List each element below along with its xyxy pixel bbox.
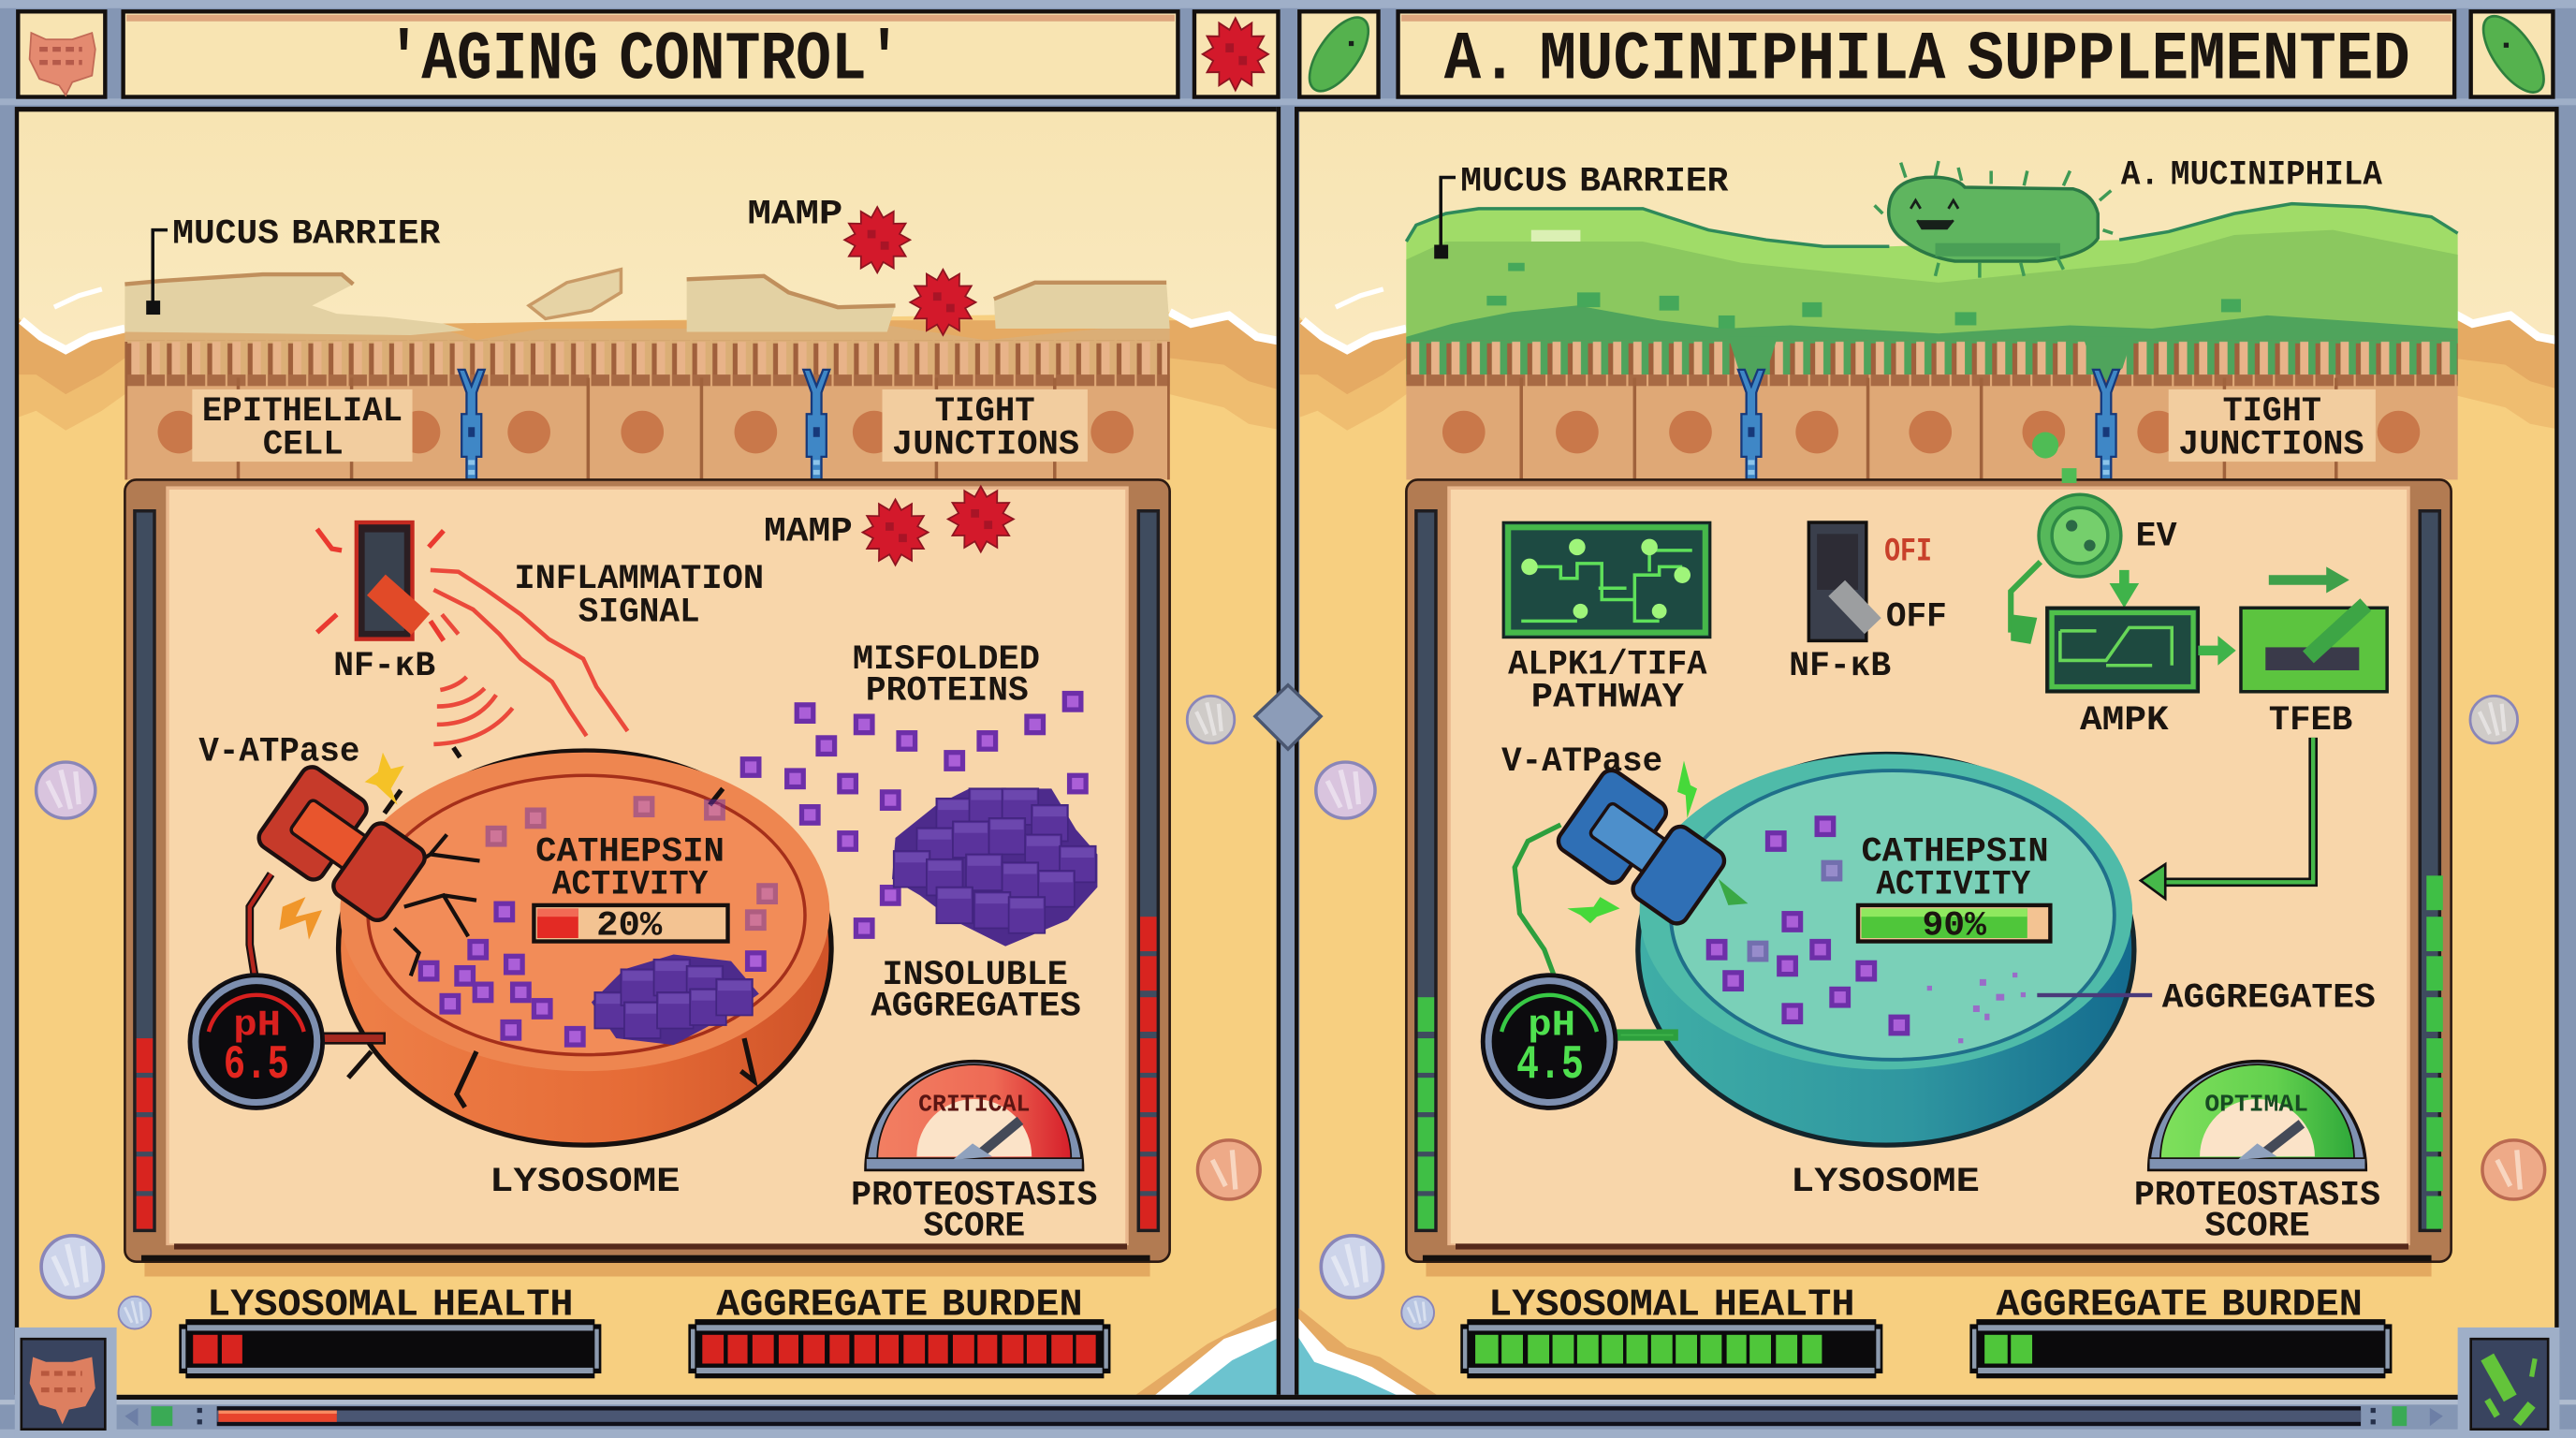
right title icon: bacterium <box>1298 7 1380 100</box>
left title icon: intestine <box>18 11 105 97</box>
ALPK1/TIFA label: PATHWAY <box>1531 679 1685 718</box>
down arrow EV to AMPK <box>2110 570 2139 608</box>
healthy teal lysosome <box>1638 754 2134 1145</box>
center divider diamond <box>1255 685 1321 749</box>
left panel sea corner <box>1134 1306 1280 1397</box>
cathepsin activity label and bar: CATHEPSIN <box>535 833 724 873</box>
epithelial cell label <box>192 389 413 464</box>
cathepsin activity label and bar right <box>1858 833 2050 946</box>
TFEB arrow to lysosome <box>2141 738 2313 899</box>
curved arrow from EV to AMPK <box>2011 562 2041 644</box>
aggregate burden bar high <box>688 1319 1110 1378</box>
switch state labels: OFI <box>1884 533 1932 570</box>
tight junctions label: TIGHT <box>935 392 1035 432</box>
ALPK1/TIFA pathway circuit panel <box>1503 522 1710 638</box>
mucus barrier label with leader: MUCUS BARRIER <box>172 215 441 255</box>
MAMP particle 3 <box>862 499 929 565</box>
critical proteostasis gauge <box>866 1062 1083 1169</box>
left panel: aging control <box>18 109 1283 1400</box>
MAMP particle 4 <box>948 486 1014 552</box>
tight junctions label <box>882 389 1088 464</box>
left beach background <box>18 109 1283 1400</box>
lysosomal health label: LYSOSOMAL HEALTH <box>207 1284 574 1328</box>
proteostasis score label: SCORE <box>923 1208 1025 1247</box>
ALPK1/TIFA label: ALPK1/TIFA <box>1508 645 1707 684</box>
left title bar: 'AGING CONTROL' <box>386 22 902 99</box>
left title icon: MAMP <box>1194 11 1278 97</box>
pH gauge 6.5 <box>189 975 324 1109</box>
spark icons <box>279 753 404 940</box>
right inner panel frame <box>1406 479 2452 1277</box>
green energy bolts <box>1567 760 1697 923</box>
V-ATPase label: V-ATPase <box>198 732 359 771</box>
left panel shells <box>37 696 1260 1328</box>
right panel: a. muciniphila supplemented <box>1296 109 2565 1400</box>
aggregate burden label: AGGREGATE BURDEN <box>716 1284 1083 1328</box>
pH gauge 4.5: 4.5 <box>1516 1039 1584 1093</box>
right title bar: A. MUCINIPHILA SUPPLEMENTED <box>1444 22 2410 99</box>
pH gauge 6.5: 6.5 <box>224 1039 289 1093</box>
lysosomal health bar low <box>179 1319 601 1378</box>
inflammation signal label: SIGNAL <box>578 593 700 632</box>
right panel shells <box>1316 696 2545 1328</box>
right panel sea corner <box>1296 1306 1439 1397</box>
bottom right control icons <box>2371 1406 2443 1426</box>
proteostasis score label right <box>2134 1176 2380 1247</box>
tight junctions label right: JUNCTIONS <box>2178 425 2364 464</box>
tight junctions label: JUNCTIONS <box>892 425 1079 464</box>
left tight junction zipper 1 <box>459 370 485 479</box>
TFEB switch box <box>2241 566 2387 692</box>
NF-kB switch off <box>1808 522 1873 640</box>
bottom left corner icon: intestine <box>15 1328 117 1437</box>
bottom progress track <box>217 1406 2361 1426</box>
proteins inside teal lysosome <box>1706 815 1910 1035</box>
left inner panel frame <box>124 479 1170 1277</box>
right epithelial cell row <box>1406 337 2458 479</box>
right beach background <box>1299 109 2565 1400</box>
optimal proteostasis gauge: OPTIMAL <box>2204 1090 2308 1118</box>
EV label: EV <box>2136 518 2177 557</box>
pH gauge 6.5: pH <box>233 1005 281 1047</box>
left tight junction zipper 2 <box>803 370 829 479</box>
optimal proteostasis gauge <box>2149 1062 2365 1169</box>
misfolded proteins label: PROTEINS <box>866 672 1029 712</box>
cleared aggregate dots <box>1927 973 2026 1043</box>
mucus barrier label right <box>1434 163 1729 258</box>
proteostasis score label right: PROTEOSTASIS <box>2134 1176 2380 1215</box>
switch state labels <box>1884 533 1947 638</box>
lysosome label right: LYSOSOME <box>1791 1163 1980 1202</box>
proteostasis score label: PROTEOSTASIS <box>851 1176 1097 1215</box>
NF-kB label: NF-κB <box>333 647 435 686</box>
arrow AMPK to TFEB <box>2198 636 2236 666</box>
damaged orange lysosome <box>339 747 831 1145</box>
cathepsin activity label and bar: 20% <box>596 906 663 946</box>
insoluble aggregate cluster <box>892 788 1097 946</box>
right meter green segments <box>2426 875 2443 1229</box>
MAMP label upper: MAMP <box>748 196 842 235</box>
cathepsin activity label and bar right: ACTIVITY <box>1876 866 2031 905</box>
bottom left control icons <box>124 1406 202 1426</box>
inflammation signal waves <box>431 570 627 744</box>
right tight junction zipper 2 <box>2093 370 2119 479</box>
proteostasis score label right: SCORE <box>2204 1208 2310 1247</box>
NF-kB switch on <box>317 522 444 640</box>
insoluble aggregates label: AGGREGATES <box>871 987 1081 1026</box>
cathepsin activity label and bar: ACTIVITY <box>552 866 709 905</box>
tight junctions label right: TIGHT <box>2223 392 2321 432</box>
proteins inside lysosome <box>418 796 778 1048</box>
cathepsin activity label and bar right: 90% <box>1922 906 1987 946</box>
cathepsin activity label and bar <box>534 833 728 946</box>
V-ATPase label right: V-ATPase <box>1501 742 1662 782</box>
right tight junction zipper 1 <box>1738 370 1764 479</box>
mucus barrier label with leader <box>146 215 441 315</box>
wire from pump to pH <box>250 874 385 1043</box>
tight junctions label right <box>2169 389 2376 464</box>
misfolded proteins label <box>853 640 1040 712</box>
bottom right corner icon: bacteria <box>2458 1328 2559 1437</box>
left mucus barrier, degraded <box>124 270 1170 378</box>
misfolded protein squares <box>740 691 1089 939</box>
lysosomal health bar high <box>1460 1319 1882 1378</box>
ALPK1/TIFA label <box>1508 645 1707 718</box>
lysosomal health label right: LYSOSOMAL HEALTH <box>1488 1284 1855 1328</box>
aggregate burden label right: AGGREGATE BURDEN <box>1996 1284 2363 1328</box>
insoluble aggregates label <box>871 956 1081 1026</box>
extracellular vesicle <box>2032 433 2121 577</box>
misfolded proteins label: MISFOLDED <box>853 640 1040 680</box>
cathepsin activity label and bar right: CATHEPSIN <box>1862 833 2049 873</box>
left meter: low health segments <box>137 1038 153 1229</box>
left title bar <box>124 11 1178 99</box>
aggregate inside lysosome <box>592 955 759 1045</box>
pH gauge 4.5: pH <box>1528 1005 1575 1047</box>
proteostasis score label <box>851 1176 1097 1247</box>
V-ATPase blue pump <box>1554 766 1748 931</box>
TFEB label: TFEB <box>2269 701 2352 741</box>
right mucus barrier, thick green <box>1406 204 2458 381</box>
epithelial cell label: EPITHELIAL <box>202 392 402 432</box>
aggregates pointer line <box>2037 993 2152 997</box>
epithelial cell label: CELL <box>263 425 344 464</box>
MAMP label inside: MAMP <box>764 512 853 551</box>
V-ATPase red pump <box>255 763 433 928</box>
pH gauge 4.5 <box>1482 975 1617 1109</box>
NF-kB label right: NF-κB <box>1789 647 1891 686</box>
MAMP particle 2 <box>910 270 976 335</box>
mucus barrier label right: MUCUS BARRIER <box>1460 163 1729 202</box>
left meter green segments <box>1418 997 1434 1229</box>
right title icon: bacterium mirrored <box>2471 7 2555 102</box>
AMPK box <box>2047 608 2198 692</box>
A. muciniphila bacterium <box>1875 161 2113 278</box>
switch state labels: OFF <box>1886 598 1947 638</box>
inflammation signal label <box>514 560 764 632</box>
aggregate burden bar low <box>1969 1319 2392 1378</box>
aggregates label: AGGREGATES <box>2162 979 2376 1019</box>
insoluble aggregates label: INSOLUBLE <box>882 956 1068 995</box>
lysosome label: LYSOSOME <box>490 1163 681 1202</box>
critical proteostasis gauge: CRITICAL <box>918 1090 1030 1118</box>
A. muciniphila label: A. MUCINIPHILA <box>2121 156 2383 196</box>
AMPK label: AMPK <box>2080 701 2170 741</box>
green wire to pH gauge <box>1515 825 1676 1038</box>
inflammation signal label: INFLAMMATION <box>514 560 764 599</box>
MAMP particle 1 <box>844 207 910 272</box>
left epithelial cell row <box>124 340 1170 479</box>
right meter: high burden segments <box>1140 917 1157 1229</box>
